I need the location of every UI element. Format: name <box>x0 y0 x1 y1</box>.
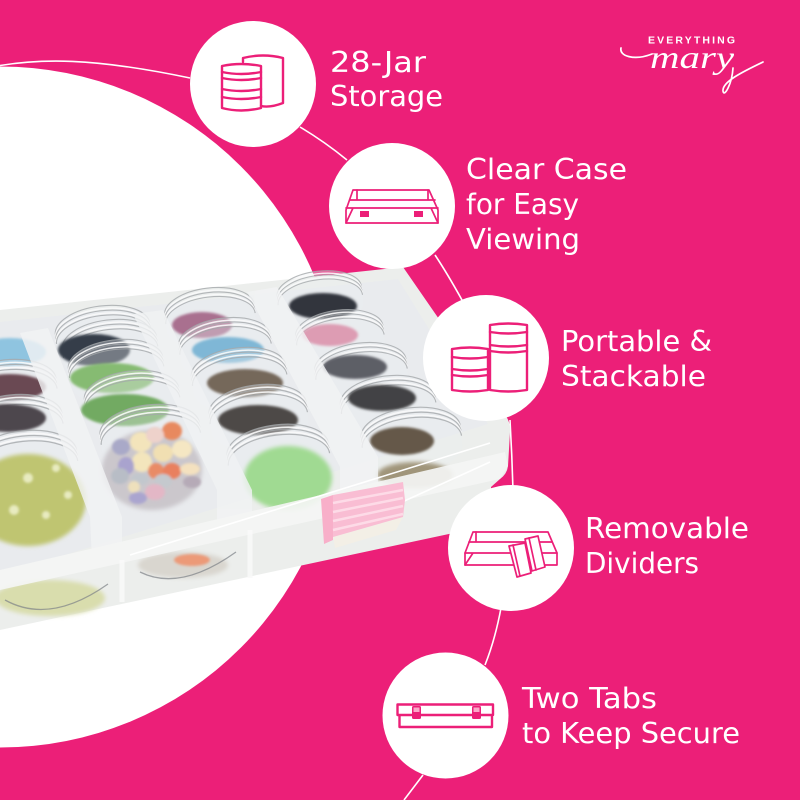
label: Viewing <box>466 223 580 256</box>
circle 1 <box>190 21 316 147</box>
label: Stackable <box>561 360 706 393</box>
front wall reflections <box>0 552 236 616</box>
case interior <box>0 279 488 575</box>
label: Clear Case <box>466 153 627 186</box>
jars, column 2 <box>53 300 204 510</box>
circle 4 <box>448 485 574 611</box>
circle 2 <box>329 143 455 269</box>
logo <box>621 34 763 93</box>
label: Dividers <box>585 547 699 580</box>
icon: open case <box>346 190 438 223</box>
feature: portable and stackable <box>423 295 712 421</box>
jars, column 4 <box>275 266 465 488</box>
case body <box>0 267 510 630</box>
connecting line <box>0 61 513 800</box>
label <box>466 153 627 256</box>
label <box>330 46 443 113</box>
label <box>561 325 712 393</box>
feature: clear case <box>329 143 627 269</box>
icon: jars <box>222 56 283 110</box>
feature: two tabs <box>382 652 740 778</box>
logo: mary <box>650 39 735 75</box>
icon: closed case <box>398 704 493 727</box>
icon: tray with dividers <box>465 532 557 577</box>
white background circle <box>0 66 340 748</box>
bead sparkle, yellow <box>9 464 72 519</box>
label: for Easy <box>466 188 579 221</box>
front rim of the case <box>0 452 508 590</box>
jars, column 1 <box>0 338 86 546</box>
label: Removable <box>585 512 749 545</box>
circle 5 <box>382 652 508 778</box>
product: clear bead storage case <box>0 266 510 630</box>
icon: stacks <box>452 324 527 392</box>
label: to Keep Secure <box>522 717 740 750</box>
clasp tab <box>321 482 405 548</box>
label: Two Tabs <box>521 682 657 715</box>
label <box>521 682 740 750</box>
feature: 28-jar storage <box>190 21 443 147</box>
label <box>585 512 749 580</box>
label: Portable & <box>561 325 712 358</box>
highlights on the lid <box>122 443 490 602</box>
circle 3 <box>423 295 549 421</box>
logo: EVERYTHING <box>648 34 735 46</box>
feature: removable dividers <box>448 485 749 611</box>
compartment dividers <box>20 287 378 562</box>
letter beads <box>111 422 201 504</box>
label: Storage <box>330 80 443 113</box>
jars, column 3 <box>162 283 334 510</box>
label: 28-Jar <box>330 46 426 79</box>
